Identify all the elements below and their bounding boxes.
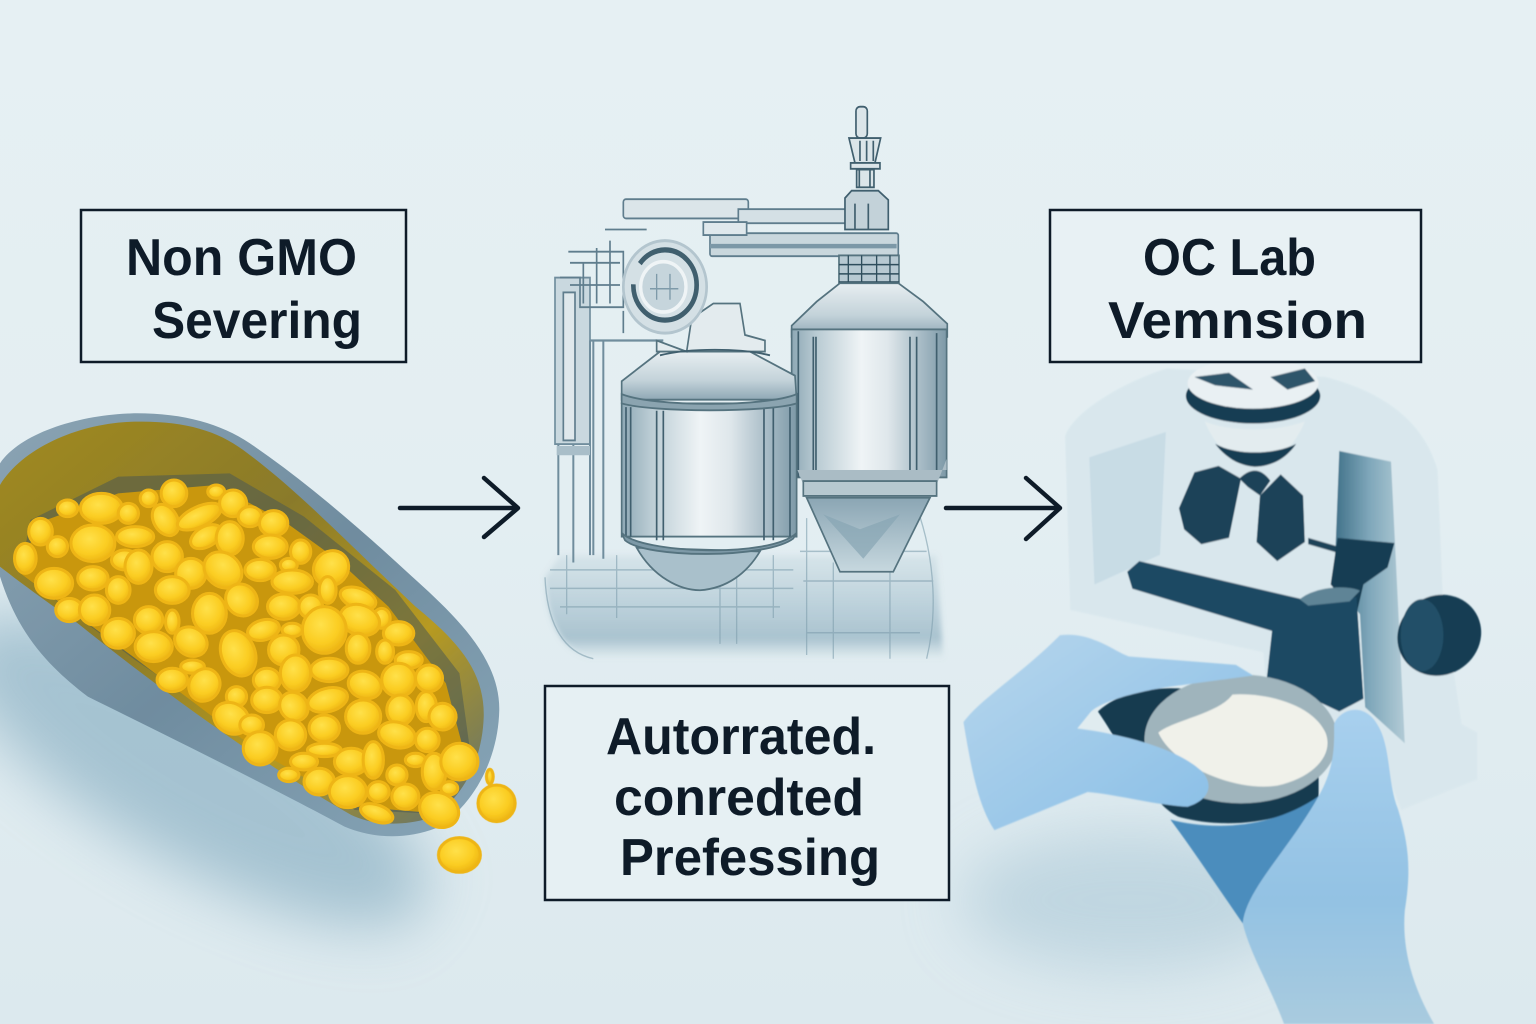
mast	[845, 107, 888, 230]
corn scoop	[0, 413, 515, 872]
label: Autorrated conredted Prefessing	[545, 686, 949, 900]
scoop body	[0, 413, 499, 836]
label: Non GMO Severing: Severing	[152, 292, 362, 350]
label: OC Lab Vemnsion: Vemnsion	[1108, 292, 1367, 350]
left tank	[622, 304, 797, 590]
label: Non GMO Severing	[81, 210, 406, 362]
kernels	[15, 480, 515, 872]
upper pipes	[623, 199, 898, 256]
porthole	[623, 241, 707, 333]
processing machine	[545, 107, 947, 659]
sample dish	[1098, 675, 1338, 823]
arrow: corn to processing	[400, 478, 518, 537]
left glove	[963, 635, 1253, 830]
focus knob	[1393, 588, 1485, 682]
label: OC Lab Vemnsion: OC Lab	[1143, 229, 1316, 287]
left column and frame	[555, 230, 663, 562]
label: Non GMO Severing: Non GMO	[126, 229, 357, 287]
eyepieces	[1179, 466, 1338, 561]
microscope body	[1065, 368, 1477, 810]
label: OC Lab Vemnsion	[1050, 210, 1421, 362]
label: Autorrated conredted Prefessing: Autorrated.	[606, 708, 876, 766]
microscope and gloved hands	[963, 358, 1485, 1024]
scoop kernel shadow	[20, 473, 470, 813]
right tank	[792, 255, 947, 572]
label: Autorrated conredted Prefessing: Prefessing	[620, 829, 880, 887]
machine base reflection	[545, 507, 943, 659]
label: Autorrated conredted Prefessing: conredted	[614, 769, 864, 827]
arrow: processing to lab	[946, 478, 1060, 539]
stage arm and column	[1127, 538, 1394, 712]
scoop interior	[0, 422, 484, 824]
right glove	[1170, 710, 1434, 1024]
objective head	[1186, 358, 1320, 467]
microscope recesses	[1089, 432, 1405, 743]
